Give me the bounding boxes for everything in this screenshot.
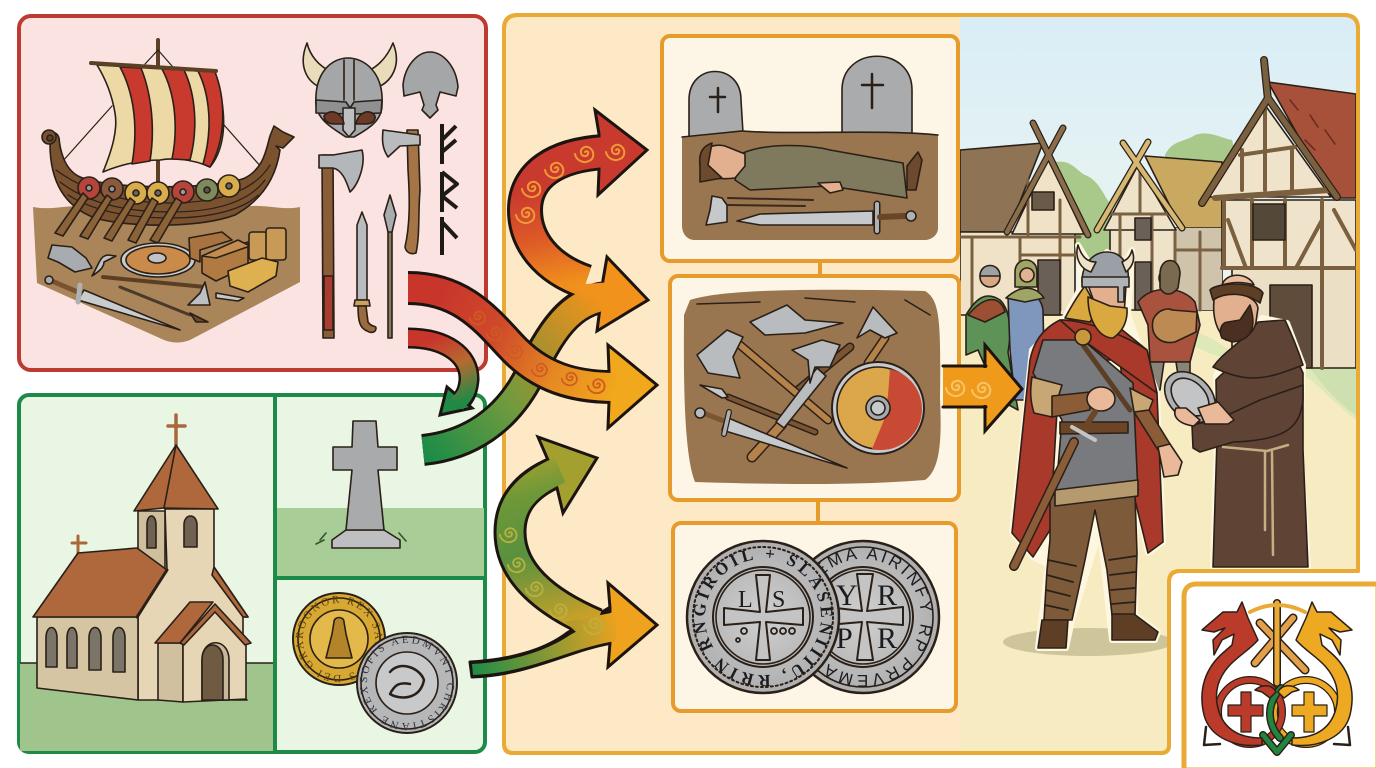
- arrow: green arc outline: [510, 472, 596, 624]
- arrow: green from gravestone to hoard: [423, 297, 610, 450]
- panel: Christian influences: [17, 393, 487, 754]
- arrow: pagan panel to Christian panel: [408, 338, 472, 415]
- arrows: red arc and green arc into the hoard: [423, 110, 648, 450]
- arrowhead: orange lower: [608, 583, 657, 667]
- halo: [1012, 245, 1163, 648]
- church ground: [20, 663, 274, 753]
- figure: blue villager: [1008, 293, 1045, 400]
- arrow: hoard to hybrid figures: [943, 345, 1022, 431]
- left house: [960, 123, 1088, 315]
- box: hoard of weapons: [670, 276, 959, 500]
- figure: Viking warrior: [1003, 245, 1182, 656]
- buried body: [907, 152, 922, 190]
- connector between boxes: [818, 260, 820, 523]
- icon: gold coin: ROGNOR REX SANCTVS DEI GRA: [296, 596, 382, 682]
- coin: Christian silver: L: [738, 587, 753, 613]
- rings: [1274, 680, 1338, 744]
- icon: silver coin: SOFIS AEDMVNT CHRISTIANE REX: [360, 636, 454, 730]
- icon: nasal helmet: [403, 52, 458, 118]
- icon: longship: [42, 40, 294, 243]
- crossed staves: [1250, 603, 1305, 683]
- gravestone ground: [277, 508, 484, 576]
- figure: Christian monk: [1155, 275, 1308, 567]
- icon: long axe: [319, 150, 363, 338]
- right house: [1202, 60, 1356, 368]
- arrows: green arc and coin to coin hoard: [470, 437, 657, 677]
- emblem: interlaced beasts: [1202, 602, 1352, 752]
- coin: runic silver: PRVEMA AIRINFY RP PRVEMA AIRI: [818, 548, 932, 686]
- box: burials: [662, 36, 958, 261]
- villagers: [966, 260, 1200, 410]
- panel: hybrid culture: [408, 13, 1360, 755]
- arrow: coin to coin hoard outline: [470, 606, 612, 677]
- beast: red: [1202, 602, 1276, 746]
- icon: horned helmet: [303, 43, 396, 137]
- arrow: red arc to burials: [525, 152, 604, 282]
- green knot: [1263, 688, 1291, 752]
- crosses: [1228, 692, 1263, 732]
- middle house: [1097, 142, 1222, 310]
- icon: spear: [384, 195, 396, 338]
- orange panel border repaint: [504, 15, 1358, 753]
- coin: runic silver: P: [836, 622, 853, 655]
- panel: pagan Viking origins: [19, 16, 486, 370]
- runes: [442, 124, 457, 255]
- burial soil mound: [33, 206, 300, 342]
- box: coin hoard: [671, 521, 958, 713]
- arrowhead: red: [595, 110, 647, 195]
- coin: Christian silver: S: [772, 587, 785, 613]
- coin: runic silver: R: [877, 622, 897, 655]
- arrowhead: olive: [538, 437, 597, 513]
- panel: knot emblem: [1184, 584, 1376, 768]
- beast: gold: [1278, 602, 1352, 746]
- icon: stone cross: [316, 421, 406, 548]
- figure: green villager: [966, 296, 1018, 410]
- coin: Christian silver: GIROIL + SLASENIIIU, RRIN RN: [694, 550, 832, 686]
- icon: church: [33, 415, 251, 702]
- arrowhead: orange: [597, 257, 648, 331]
- village scene: [960, 17, 1356, 760]
- grave goods: [45, 228, 286, 330]
- divider lines: [275, 396, 484, 751]
- arrow: pagan panel to hoard: [408, 288, 657, 428]
- figure: drummer: [1138, 289, 1200, 362]
- icon: hand axe: [383, 130, 420, 254]
- icon: sword: [354, 212, 376, 332]
- coin: runic silver: R: [877, 579, 897, 612]
- coin: runic silver: Y: [836, 579, 858, 612]
